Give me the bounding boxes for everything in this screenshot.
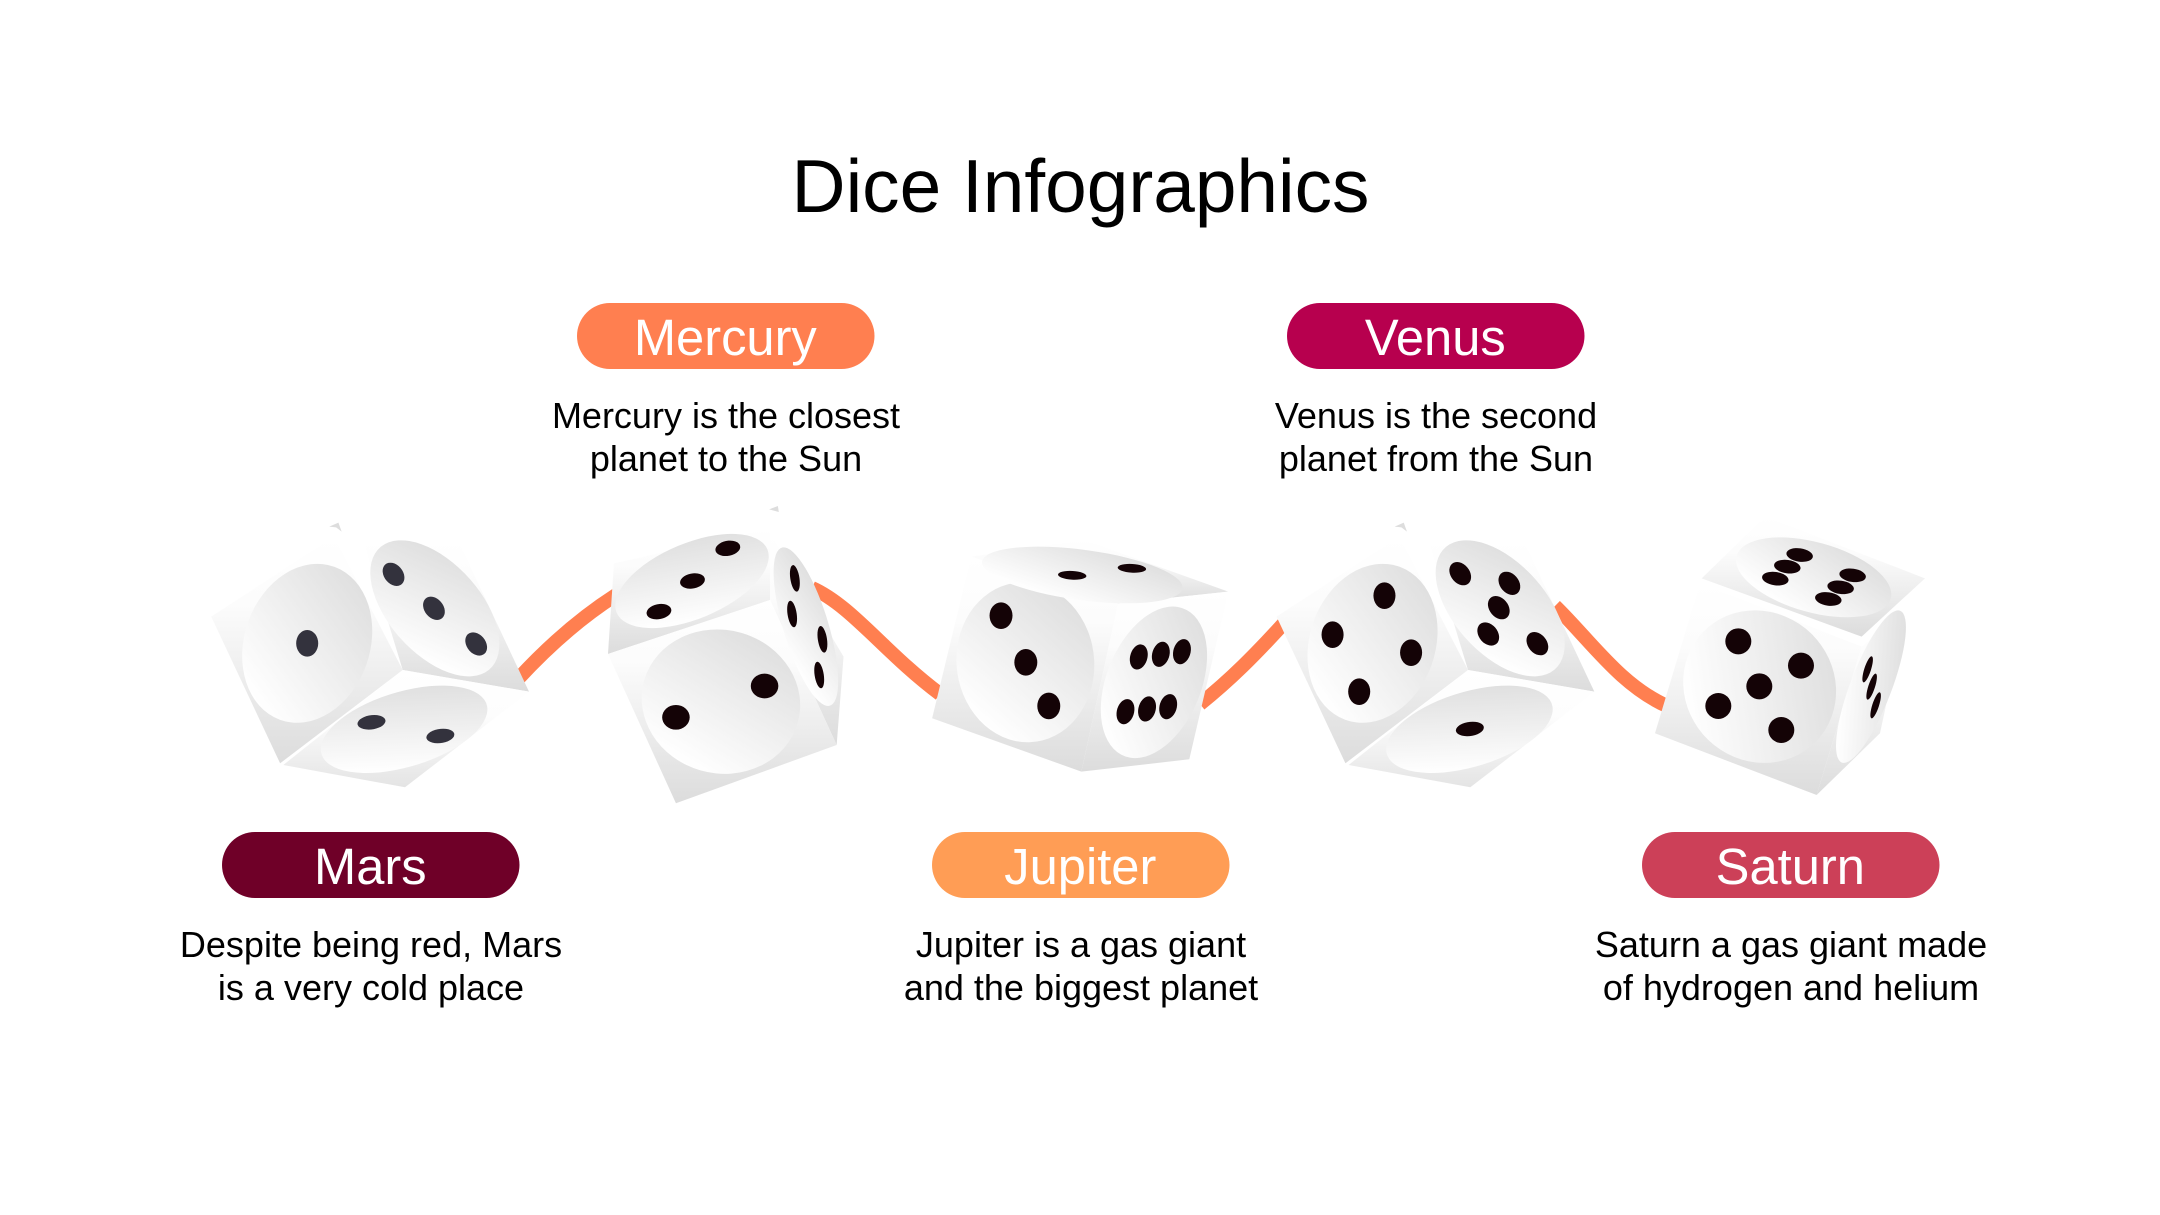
label: Mars <box>180 832 562 1008</box>
label: Venus: Venus <box>1365 309 1506 366</box>
label: Venus: planet from the Sun <box>1279 438 1593 479</box>
label: Saturn: of hydrogen and helium <box>1603 967 1979 1008</box>
die 3: Jupiter <box>932 536 1228 772</box>
label: Saturn <box>1595 832 1987 1008</box>
label: Mercury: planet to the Sun <box>590 438 862 479</box>
label: Venus: Venus is the second <box>1275 395 1597 436</box>
label: Mars: is a very cold place <box>218 967 524 1008</box>
label: Mercury <box>552 303 900 479</box>
die 5: Saturn <box>1652 517 1925 795</box>
label: Venus <box>1275 303 1597 479</box>
label: Jupiter <box>904 832 1258 1008</box>
label: Jupiter: and the biggest planet <box>904 967 1258 1008</box>
title: Dice Infographics <box>792 144 1369 228</box>
label: Jupiter: Jupiter is a gas giant <box>916 924 1246 965</box>
connecting rope between dice <box>518 588 1667 706</box>
label: Saturn: Saturn <box>1716 838 1865 895</box>
die 2: Mercury <box>592 506 852 803</box>
label: Saturn: Saturn a gas giant made <box>1595 924 1987 965</box>
label: Mars: Mars <box>314 838 427 895</box>
label: Mercury: Mercury is the closest <box>552 395 900 436</box>
die 4: Venus <box>1277 523 1594 791</box>
label: Mars: Despite being red, Mars <box>180 924 562 965</box>
label: Mercury: Mercury <box>634 309 817 366</box>
die 1: Mars <box>211 523 529 791</box>
label: Jupiter: Jupiter <box>1004 838 1156 895</box>
